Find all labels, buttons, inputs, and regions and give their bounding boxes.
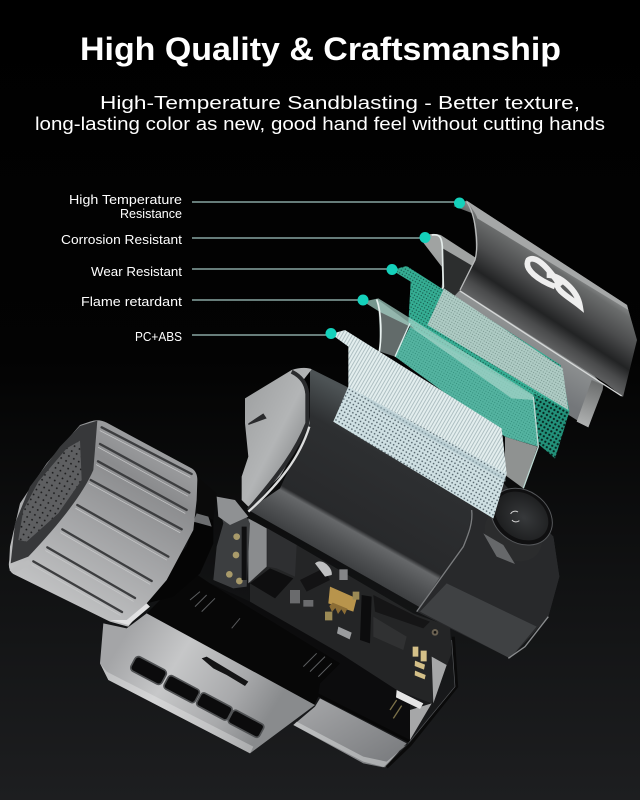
layer: flame retardant	[363, 298, 538, 488]
callout: PC+ABS	[135, 328, 336, 344]
callout: Flame retardant: Flame retardant	[81, 295, 183, 309]
left connector board	[213, 497, 250, 588]
callout: PC+ABS: PC+ABS	[135, 330, 182, 344]
dial front face	[11, 421, 97, 563]
speaker mesh	[18, 441, 82, 542]
chassis edge	[387, 637, 457, 767]
connector pins	[190, 592, 332, 677]
main body cylinder	[242, 368, 563, 658]
callout: Corrosion Resistant	[61, 232, 430, 247]
callout: Wear Resistant	[91, 264, 398, 279]
card slot	[202, 657, 248, 686]
black rail	[210, 583, 410, 740]
lens knob	[474, 498, 552, 572]
layer: high temperature resistance	[453, 201, 637, 397]
callout: Corrosion Resistant: Corrosion Resistant	[61, 233, 183, 247]
callout lines and labels	[61, 193, 465, 344]
callout: High Temperature Resistance	[69, 193, 465, 221]
silver lower bracket	[293, 698, 407, 767]
gold chip	[328, 587, 357, 612]
layer: corrosion resistant	[420, 234, 603, 427]
board surface	[250, 528, 452, 703]
subtitle	[35, 92, 605, 134]
lower bracket and circuit board	[147, 497, 457, 767]
dial neck	[147, 477, 217, 603]
callout: Wear Resistant: Wear Resistant	[91, 265, 183, 279]
exploded shell layers	[331, 201, 637, 518]
silver mounting plate with vents	[100, 613, 315, 753]
silver side walls	[410, 657, 447, 740]
title: High Quality & Craftsmanship	[80, 31, 561, 67]
callout: Flame retardant	[81, 294, 368, 309]
callout: High Temperature Resistance: Resistance	[120, 207, 182, 221]
layer: PC+ABS mesh	[331, 330, 507, 518]
dial grooves	[32, 427, 192, 615]
vents	[129, 655, 265, 738]
dial cap	[9, 420, 197, 627]
black chassis	[147, 570, 410, 743]
subtitle: High-Temperature Sandblasting - Better texture,	[100, 92, 580, 113]
board components	[232, 528, 438, 718]
layer: wear resistant	[392, 266, 569, 458]
rear plate	[242, 368, 312, 507]
callout: High Temperature Resistance: High Temperature	[69, 193, 182, 207]
subtitle: long-lasting color as new, good hand feel without cutting hands	[35, 113, 605, 134]
layer logo	[527, 259, 580, 306]
camera body and internals	[9, 368, 563, 767]
